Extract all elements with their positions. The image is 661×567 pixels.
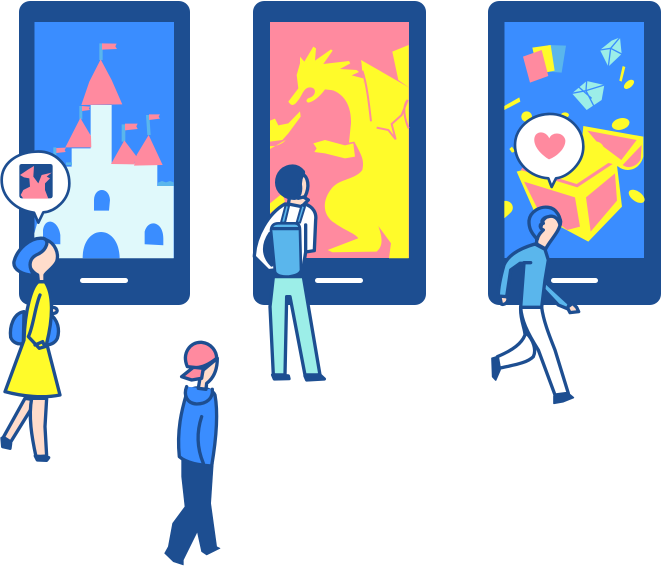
back leg: [497, 307, 540, 368]
arm: [542, 282, 569, 309]
neck: [288, 195, 308, 207]
treasure illustration: [504, 37, 647, 242]
person: man in cap: [165, 342, 220, 565]
phone: treasure: [488, 1, 661, 305]
coins: [504, 66, 647, 218]
front leg: [521, 307, 568, 395]
speech bubble: heart: [515, 114, 583, 187]
cap: [182, 342, 217, 380]
torso: [498, 244, 548, 307]
person: running man: [492, 207, 579, 403]
shirt: [254, 204, 316, 271]
backpack side: [265, 233, 272, 265]
legs: [3, 398, 37, 442]
person: woman in yellow dress: [2, 238, 60, 460]
trousers: [165, 460, 220, 565]
heart icon: [534, 132, 565, 159]
back hand / front hand: [500, 296, 579, 313]
chest: [517, 126, 643, 242]
speech bubble: dragon: [2, 152, 69, 223]
diamonds: [572, 37, 622, 110]
dragon illustration: [270, 45, 409, 258]
dress: [5, 282, 60, 397]
castle illustration: [34, 43, 174, 258]
cards: [523, 45, 566, 83]
head: [298, 173, 308, 198]
person: backpack man: [254, 166, 324, 380]
head: [537, 215, 561, 249]
head: [28, 240, 57, 282]
phone: castle: [19, 1, 190, 305]
phone: dragon: [253, 1, 426, 305]
backpack: [271, 223, 301, 277]
bag: [10, 312, 58, 345]
dragon icon: [20, 166, 52, 199]
legs: [270, 277, 320, 375]
neck and face: [198, 358, 217, 389]
jacket: [179, 388, 217, 466]
